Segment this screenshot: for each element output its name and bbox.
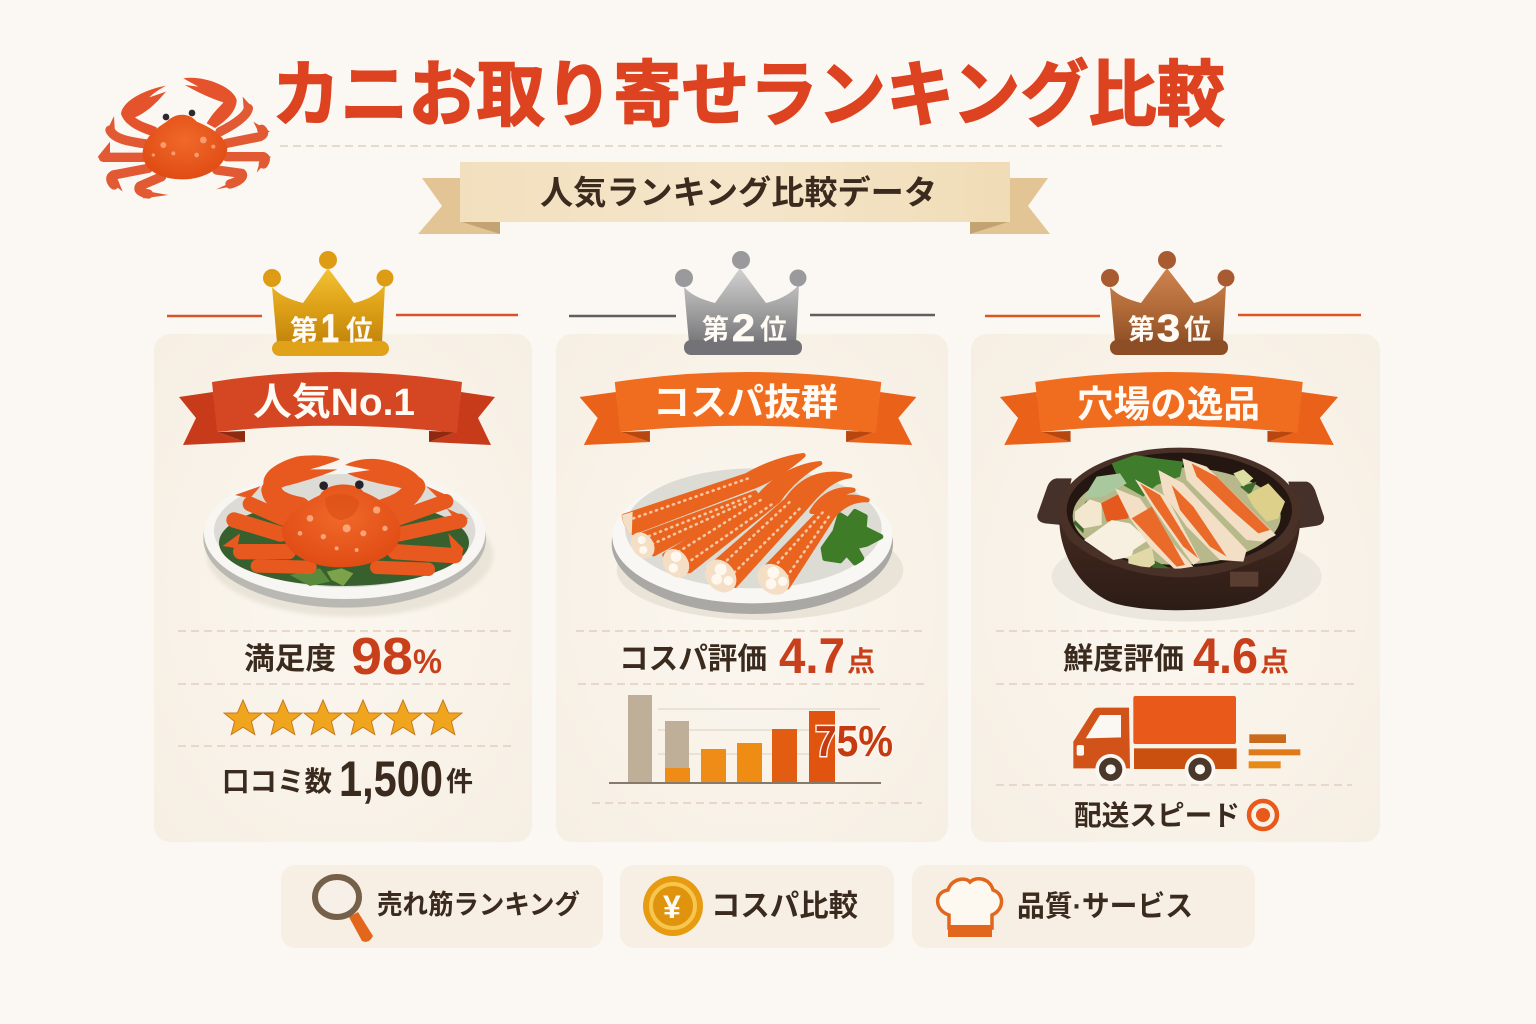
stat: 鮮度評価 4.6点: 4.6 <box>1193 628 1258 684</box>
stat: 鮮度評価 4.6点: 点 <box>1260 646 1289 677</box>
subtitle ribbon: 人気ランキング比較データ <box>540 174 937 211</box>
stat: 満足度 98% <box>244 628 442 686</box>
subtitle ribbon <box>418 162 1050 234</box>
ribbon: 穴場の逸品 <box>1000 372 1338 445</box>
icon: header crab <box>97 78 271 198</box>
star rating <box>224 700 462 734</box>
stat: 満足度 98%: 満足度 <box>244 643 336 676</box>
title: カニお取り寄せランキング比較 <box>272 56 1225 136</box>
stat: 口コミ数 1,500件 <box>222 751 473 807</box>
rank 2 heading lines <box>569 315 935 316</box>
stat: 満足度 98%: 98 <box>351 628 413 686</box>
crown: rank 3 bronze: 第 <box>1128 314 1155 345</box>
rank 1 divider lines <box>178 631 513 746</box>
rank 3 divider lines <box>996 631 1356 785</box>
illustration: crab hot pot <box>1037 448 1324 622</box>
footer pill: コスパ比較: コスパ比較 <box>711 890 858 923</box>
ribbon: 穴場の逸品: 穴場の逸品 <box>1077 384 1260 425</box>
crown: rank 1 gold <box>263 251 394 356</box>
icon: delivery truck <box>1073 696 1300 785</box>
crown: rank 2 silver: 2 <box>732 308 755 350</box>
stat: 口コミ数 1,500件: 件 <box>446 767 473 797</box>
bar chart: 75% <box>815 717 893 766</box>
crown: rank 1 gold: 位 <box>346 315 373 346</box>
stat: コスパ評価 4.7点: 点 <box>847 646 875 677</box>
footer pill: 品質・サービス: 品質·サービス <box>1017 890 1193 923</box>
stat: 口コミ数 1,500件: 口コミ数 <box>222 766 332 797</box>
footer pill: コスパ比較 <box>620 865 894 948</box>
rank 3 heading lines <box>985 315 1361 316</box>
crown: rank 1 gold: 第 <box>290 315 318 346</box>
crown: rank 3 bronze: 位 <box>1184 314 1211 345</box>
stat: 鮮度評価 4.6点 <box>1063 628 1289 684</box>
stat: コスパ評価 4.7点: コスパ評価 <box>619 643 767 676</box>
panel: rank 3 <box>971 334 1380 842</box>
crown: rank 3 bronze <box>1101 251 1234 355</box>
crown: rank 2 silver: 位 <box>760 314 787 345</box>
stat: 満足度 98%: % <box>413 643 442 681</box>
panel: rank 2 <box>556 334 948 842</box>
crown: rank 3 bronze: 3 <box>1157 308 1180 350</box>
crown: rank 2 silver: 第 <box>702 314 729 345</box>
crown: rank 2 silver <box>675 251 806 355</box>
panel: rank 1 <box>154 334 532 842</box>
illustration: whole crab on plate <box>203 455 493 617</box>
ribbon: 人気No.1: 人気No.1 <box>253 382 415 424</box>
rank 1 heading lines <box>167 315 518 316</box>
footer pill: コスパ比較: ¥ <box>663 889 681 925</box>
crown: rank 1 gold: 1 <box>321 307 339 351</box>
stat: 配送スピード ◎: 配送スピード <box>1074 800 1240 831</box>
stat: 鮮度評価 4.6点: 鮮度評価 <box>1063 643 1184 676</box>
stat: コスパ評価 4.7点 <box>619 628 875 684</box>
stat: 口コミ数 1,500件: 1,500 <box>339 751 443 807</box>
footer pill: 売れ筋ランキング <box>281 865 603 948</box>
footer pill: 品質・サービス <box>912 865 1255 948</box>
bar chart <box>609 695 893 783</box>
stat: コスパ評価 4.7点: 4.7 <box>779 628 845 684</box>
footer pill: 売れ筋ランキング: 売れ筋ランキング <box>377 889 580 920</box>
ribbon: コスパ抜群 <box>580 372 916 445</box>
illustration: crab legs on plate <box>612 455 903 620</box>
rank 2 divider lines <box>576 631 926 803</box>
ribbon: 人気No.1 <box>179 372 495 445</box>
ribbon: コスパ抜群: コスパ抜群 <box>653 382 838 423</box>
